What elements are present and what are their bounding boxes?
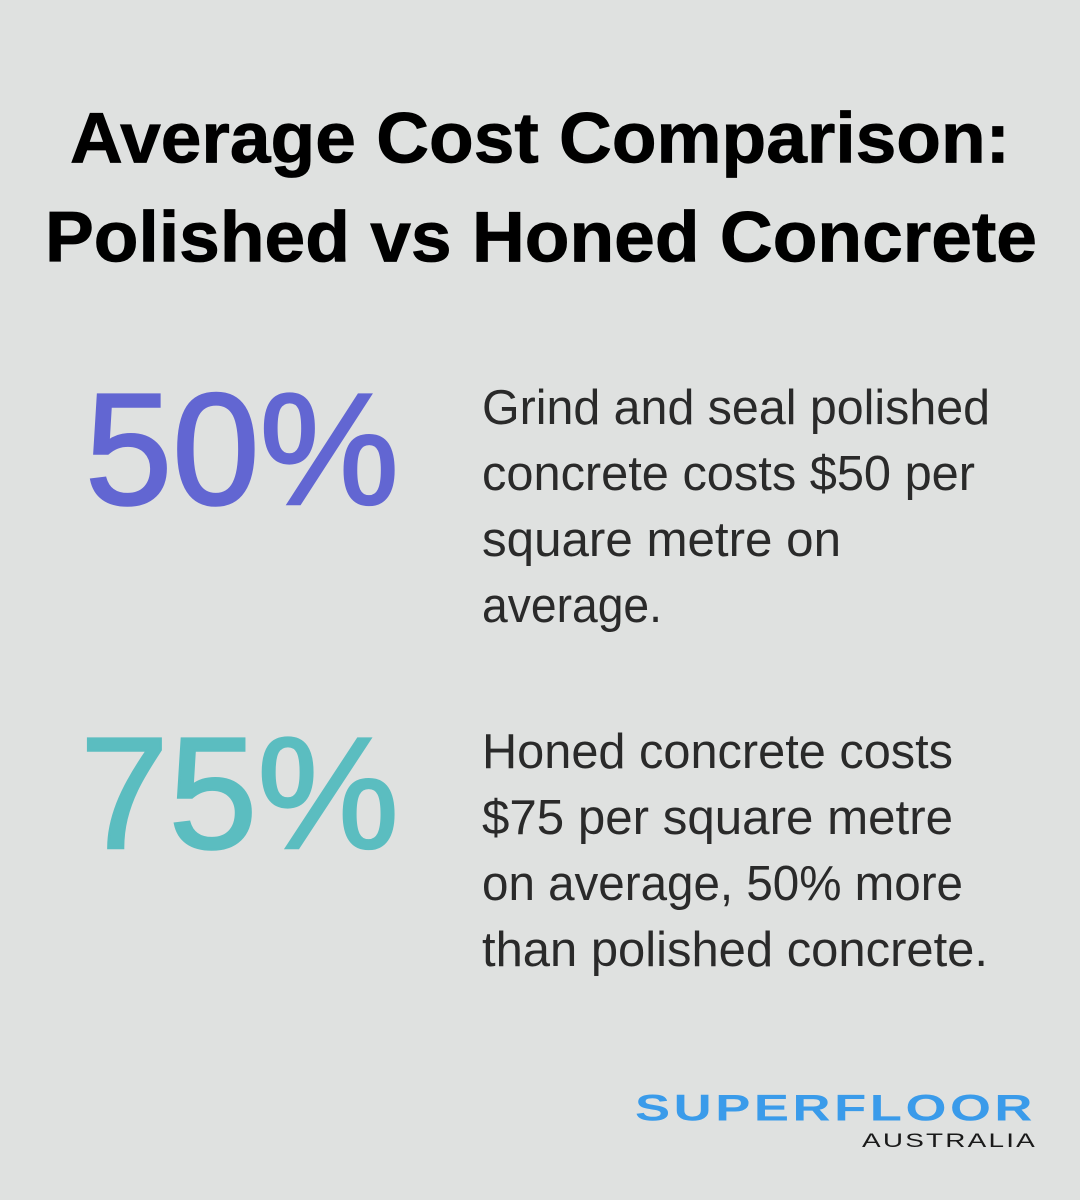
text block: honed cost: Honed concrete costs bbox=[482, 725, 953, 779]
title: Average Cost Comparison: bbox=[70, 100, 1010, 178]
text block: polished cost: concrete costs $50 per bbox=[482, 447, 975, 501]
logo: Superfloor Australia bbox=[635, 1088, 1037, 1152]
text block: honed cost: than polished concrete. bbox=[482, 923, 988, 977]
logo: Superfloor Australia: AUSTRALIA bbox=[862, 1131, 1037, 1152]
text block: honed cost: $75 per square metre bbox=[482, 791, 953, 845]
text block: polished cost: square metre on bbox=[482, 513, 841, 567]
text block: polished cost bbox=[482, 381, 990, 633]
stat: 75%: 75% bbox=[80, 704, 399, 882]
title bbox=[45, 100, 1037, 278]
text block: polished cost: Grind and seal polished bbox=[482, 381, 990, 435]
stat: 50%: 50% bbox=[85, 360, 399, 538]
text block: honed cost bbox=[482, 725, 988, 977]
text block: honed cost: on average, 50% more bbox=[482, 857, 963, 911]
logo: Superfloor Australia: SUPERFLOOR bbox=[635, 1088, 1036, 1128]
title: Polished vs Honed Concrete bbox=[45, 198, 1037, 278]
text block: polished cost: average. bbox=[482, 579, 662, 633]
